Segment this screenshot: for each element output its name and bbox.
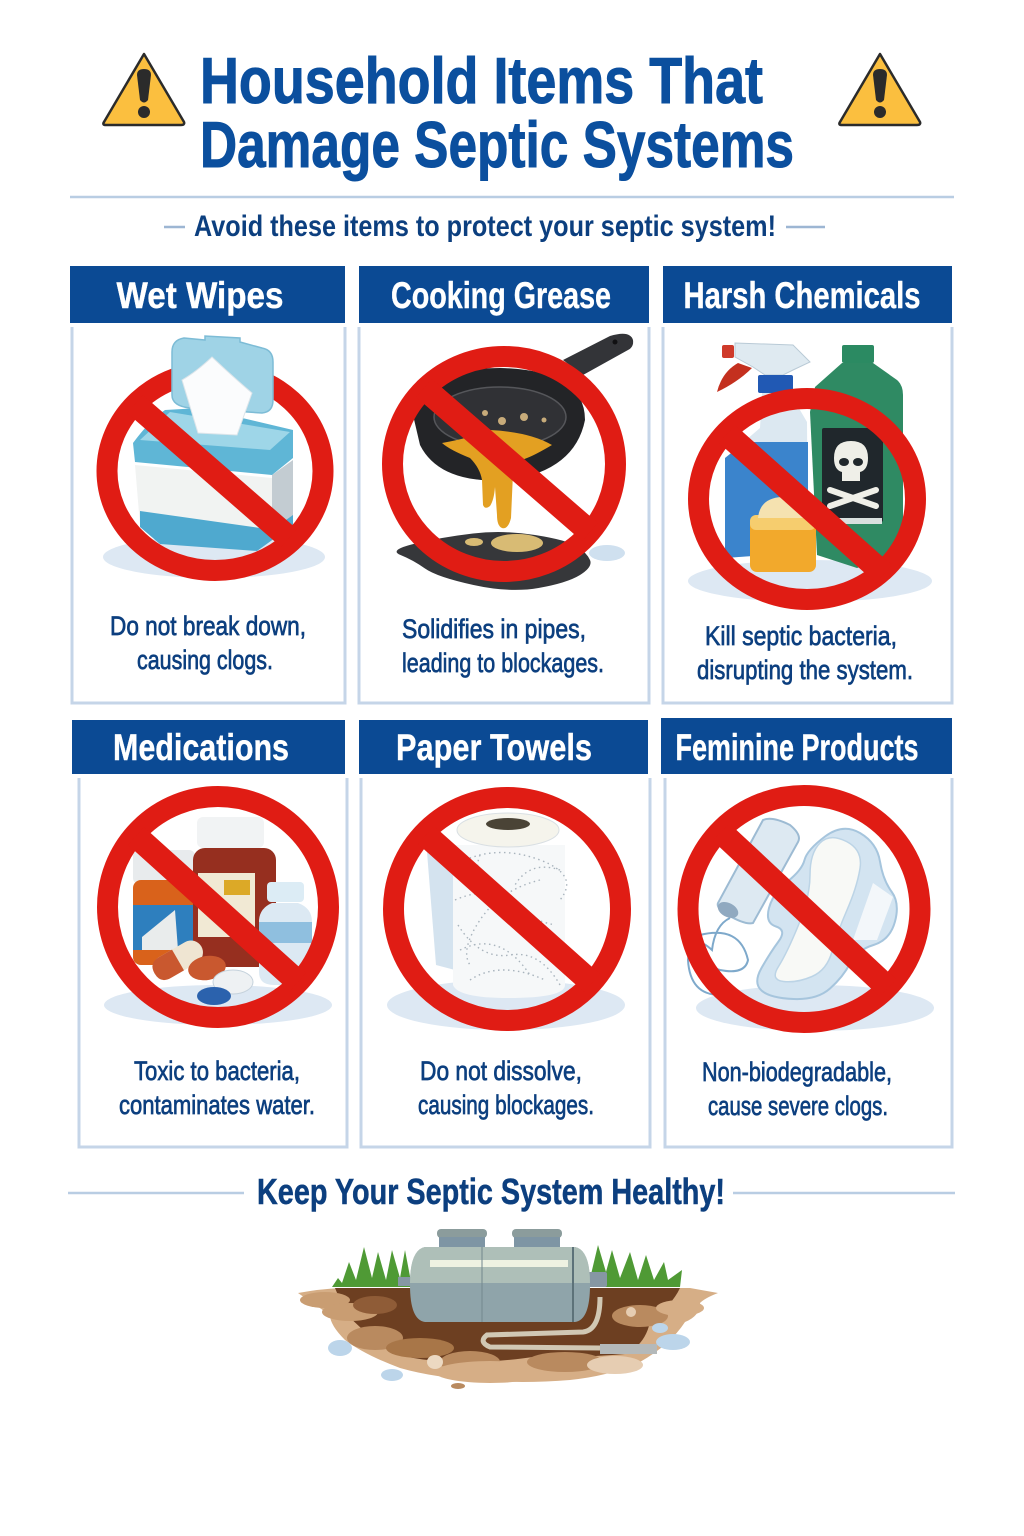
heading: medications xyxy=(72,720,345,774)
heading: harsh chemicals: Harsh Chemicals xyxy=(684,275,920,316)
caption xyxy=(418,1056,594,1120)
caption: causing blockages. xyxy=(418,1090,594,1120)
heading: wet wipes xyxy=(70,266,345,323)
caption xyxy=(110,611,306,675)
caption: Solidifies in pipes, xyxy=(402,614,586,644)
heading: cooking grease xyxy=(359,266,649,323)
title: Damage Septic Systems xyxy=(200,108,794,181)
icon: medicine bottles and pills xyxy=(104,817,332,1025)
heading: cooking grease: Cooking Grease xyxy=(391,275,611,316)
icon: prohibition sign xyxy=(392,356,616,572)
icon: prohibition sign xyxy=(698,398,916,600)
icon: prohibition sign xyxy=(688,796,920,1022)
subtitle: Avoid these items to protect your septic system! xyxy=(194,210,776,243)
icon: warning triangle right xyxy=(839,54,920,125)
heading: harsh chemicals xyxy=(663,266,952,323)
icon: prohibition sign xyxy=(107,372,323,570)
icon: warning triangle left xyxy=(103,54,184,125)
heading: feminine products xyxy=(661,718,952,774)
caption xyxy=(119,1056,315,1120)
caption: Toxic to bacteria, xyxy=(134,1056,300,1086)
icon: wipes container xyxy=(103,408,325,578)
illustration: septic tank in soil xyxy=(298,1229,718,1389)
icon: paper towel roll xyxy=(387,813,625,1030)
caption: Do not break down, xyxy=(110,611,306,641)
caption: cause severe clogs. xyxy=(708,1091,888,1121)
heading: medications: Medications xyxy=(113,727,289,768)
title xyxy=(200,44,794,181)
title: Household Items That xyxy=(200,44,763,117)
footer heading: Keep Your Septic System Healthy! xyxy=(257,1171,725,1212)
heading: paper towels xyxy=(359,720,648,774)
icon: prohibition sign xyxy=(394,798,620,1020)
caption xyxy=(702,1057,892,1121)
panel: paper towels xyxy=(359,720,650,1147)
icon: pan pouring grease xyxy=(397,334,633,590)
heading: wet wipes: Wet Wipes xyxy=(116,275,284,316)
icon: open lid and wipe xyxy=(172,336,273,435)
caption: causing clogs. xyxy=(137,645,273,675)
panel: feminine products xyxy=(661,718,952,1147)
panel: cooking grease xyxy=(359,266,649,703)
caption xyxy=(697,621,913,685)
caption: Non-biodegradable, xyxy=(702,1057,892,1087)
heading: feminine products: Feminine Products xyxy=(676,727,918,768)
panel: wet wipes xyxy=(70,266,345,703)
icon: tampon and pad xyxy=(688,819,934,1031)
icon: chemical bottles xyxy=(688,343,932,602)
caption: leading to blockages. xyxy=(402,648,604,678)
caption: Do not dissolve, xyxy=(420,1056,582,1086)
caption: contaminates water. xyxy=(119,1090,315,1120)
panel: medications xyxy=(72,720,347,1147)
heading: paper towels: Paper Towels xyxy=(396,727,592,768)
caption: disrupting the system. xyxy=(697,655,913,685)
panel: harsh chemicals xyxy=(663,266,952,703)
caption: Kill septic bacteria, xyxy=(705,621,897,651)
icon: prohibition sign xyxy=(108,796,328,1018)
caption xyxy=(402,614,604,678)
